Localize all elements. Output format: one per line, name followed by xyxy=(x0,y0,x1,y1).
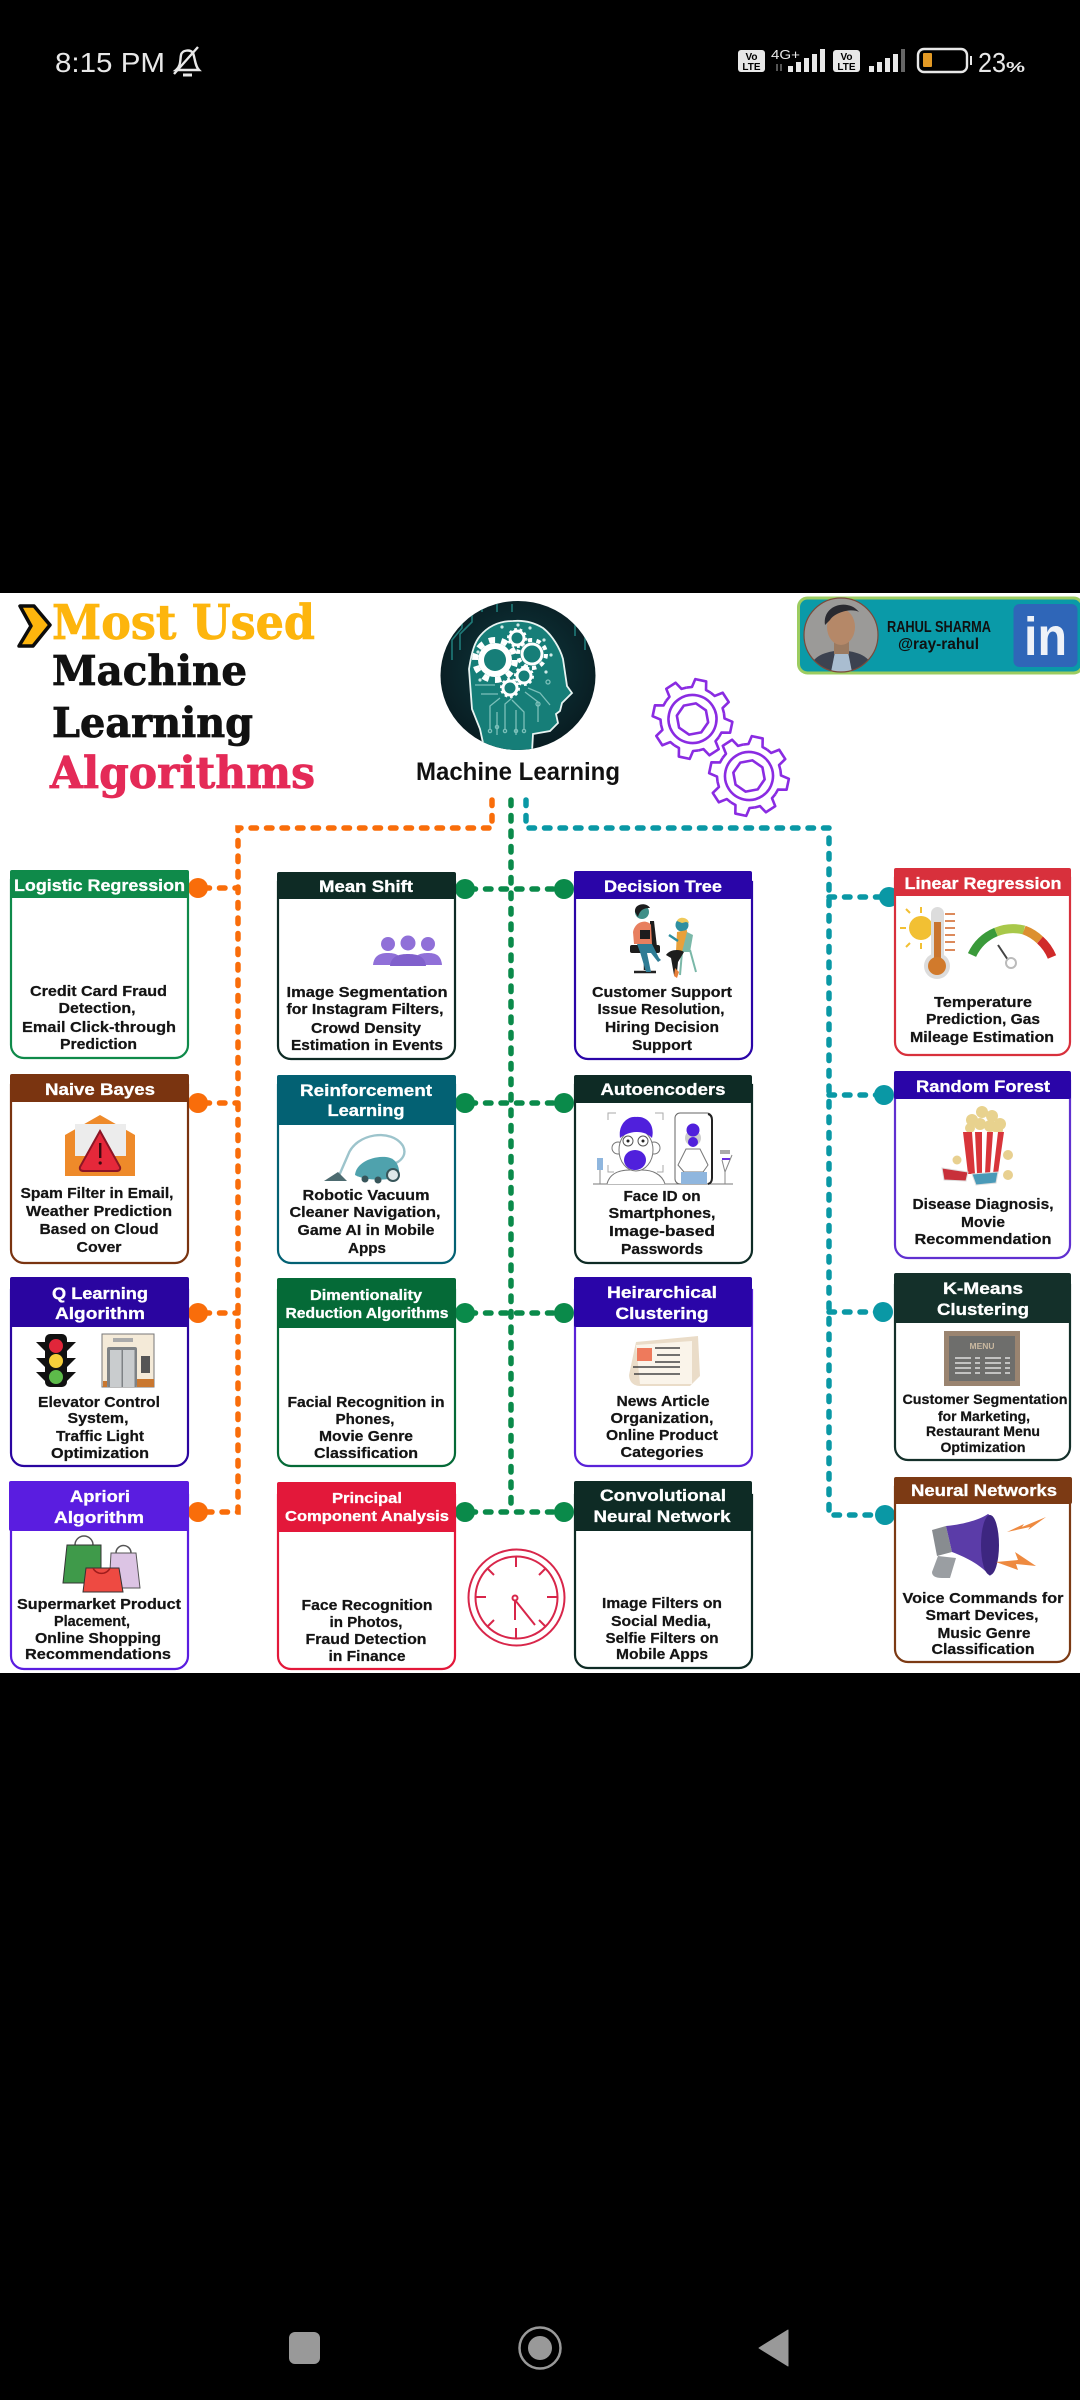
description: Crowd Density xyxy=(311,1020,422,1037)
header xyxy=(10,1074,189,1102)
card: K-Means Clustering xyxy=(894,1273,1071,1460)
description: Organization, xyxy=(610,1410,714,1427)
header: Random Forest xyxy=(916,1078,1051,1096)
description: System, xyxy=(68,1410,128,1427)
icon: purple gears xyxy=(646,672,796,823)
card: Random Forest xyxy=(894,1071,1071,1258)
header xyxy=(574,1075,752,1103)
header: Convolutional xyxy=(600,1487,726,1505)
icon: restaurant menu board: MENU xyxy=(969,1341,995,1351)
icon: VoLTE badge 1: Vo xyxy=(745,52,758,63)
description xyxy=(912,1196,1054,1248)
clock time: 8:15 PM xyxy=(55,47,165,78)
header: Component Analysis xyxy=(285,1508,449,1525)
description: Image Segmentation xyxy=(286,984,448,1001)
description: Prediction xyxy=(60,1036,137,1053)
status bar xyxy=(55,47,1025,78)
description: Customer Support xyxy=(592,984,732,1001)
header xyxy=(277,1482,456,1532)
icon: recents button xyxy=(289,2332,320,2364)
title xyxy=(19,595,315,799)
icon: thermometer and sun xyxy=(900,907,955,979)
description xyxy=(17,1596,181,1663)
connector: green xyxy=(455,800,574,1522)
icon: muted bell xyxy=(174,47,199,75)
header xyxy=(9,1481,189,1531)
icon: VoLTE badge 2: LTE xyxy=(837,62,856,73)
description: Credit Card Fraud xyxy=(30,983,167,1000)
header: Apriori xyxy=(70,1488,130,1506)
name: RAHUL SHARMA xyxy=(887,619,991,636)
icon: back button xyxy=(759,2330,788,2366)
description: Supermarket Product xyxy=(17,1596,181,1613)
description: in Photos, xyxy=(330,1614,402,1631)
description: Recommendation xyxy=(914,1231,1052,1248)
icon: VoLTE badge 1: LTE xyxy=(742,62,761,73)
description xyxy=(902,1391,1068,1455)
header: Reinforcement xyxy=(300,1082,433,1100)
header xyxy=(10,1277,189,1327)
header xyxy=(574,871,752,899)
description xyxy=(288,1394,444,1462)
description: Cleaner Navigation, xyxy=(290,1204,440,1221)
header: Learning xyxy=(328,1102,404,1120)
header: Q Learning xyxy=(52,1285,148,1303)
description: Voice Commands for xyxy=(902,1590,1064,1607)
icon: traffic light xyxy=(36,1334,76,1387)
description: Placement, xyxy=(54,1613,130,1630)
white brain gears xyxy=(475,623,553,697)
signal 2 xyxy=(869,49,905,72)
title line: Machine: Machine xyxy=(52,647,247,695)
description: Online Product xyxy=(606,1427,718,1444)
icon: megaphone xyxy=(932,1514,1046,1578)
icon: machine learning head xyxy=(440,601,596,752)
description: Optimization xyxy=(940,1439,1026,1455)
title line: Most Used: Most Used xyxy=(52,595,315,651)
header: Neural Network xyxy=(594,1508,731,1526)
connector: teal xyxy=(526,800,899,1525)
card: Neural Networks xyxy=(894,1477,1072,1662)
description: Email Click-through xyxy=(22,1019,176,1036)
description: Restaurant Menu xyxy=(926,1423,1040,1439)
description: for Instagram Filters, xyxy=(286,1001,444,1018)
description: Cover xyxy=(76,1239,122,1256)
header xyxy=(277,1278,456,1328)
description: Movie xyxy=(961,1214,1005,1231)
header xyxy=(894,1071,1071,1099)
header: Mean Shift xyxy=(319,878,414,896)
description: Hiring Decision xyxy=(605,1019,719,1036)
navigation bar xyxy=(289,2328,788,2368)
icon: VoLTE badge 2: Vo xyxy=(840,52,853,63)
card: Convolutional Neural Network xyxy=(574,1481,752,1668)
icon: people group xyxy=(373,936,442,966)
icon: two people talking xyxy=(630,904,696,978)
header: K-Means xyxy=(943,1280,1023,1298)
description: Optimization xyxy=(51,1445,149,1462)
description xyxy=(910,994,1054,1046)
header: Clustering xyxy=(937,1301,1029,1319)
header xyxy=(894,1273,1071,1323)
description: Smartphones, xyxy=(608,1205,716,1222)
icon: spam envelope xyxy=(65,1115,135,1176)
description: Fraud Detection xyxy=(306,1631,426,1648)
battery percent xyxy=(978,47,1025,78)
description: Traffic Light xyxy=(56,1428,144,1445)
icon: shopping bags xyxy=(63,1536,140,1592)
card: Naive Bayes xyxy=(10,1074,189,1263)
card: Logistic Regression xyxy=(10,870,189,1058)
description: Elevator Control xyxy=(38,1394,160,1411)
connector: orange xyxy=(188,800,492,1522)
description: Face Recognition xyxy=(302,1597,432,1614)
description: Facial Recognition in xyxy=(288,1394,444,1411)
handle: @ray-rahul xyxy=(898,636,979,653)
header: Linear Regression xyxy=(904,875,1062,893)
description: Detection, xyxy=(58,1000,136,1017)
icon: VoLTE badge 2 xyxy=(833,50,860,73)
card: Q Learning Algorithm xyxy=(10,1277,189,1466)
description xyxy=(22,983,176,1053)
description: Mileage Estimation xyxy=(910,1029,1054,1046)
header xyxy=(10,870,189,898)
description: Issue Resolution, xyxy=(598,1001,724,1018)
description: Phones, xyxy=(336,1411,394,1428)
description: Apps xyxy=(348,1240,386,1257)
description: Image-based xyxy=(609,1223,715,1240)
header xyxy=(894,868,1071,896)
description: Robotic Vacuum xyxy=(302,1187,430,1204)
battery percent: 23 xyxy=(978,47,1006,78)
description: Movie Genre xyxy=(319,1428,413,1445)
signal 1 with 4G+ xyxy=(771,47,825,72)
description: Mobile Apps xyxy=(616,1646,708,1663)
description: Online Shopping xyxy=(35,1630,161,1647)
signal 1 with 4G+: 4G+ xyxy=(771,47,800,62)
icon: elevator xyxy=(102,1334,154,1387)
photo xyxy=(804,598,878,672)
description: Prediction, Gas xyxy=(926,1011,1040,1028)
icon: LinkedIn: in xyxy=(1024,607,1067,667)
description: Recommendations xyxy=(25,1646,171,1663)
description: Music Genre xyxy=(938,1625,1030,1642)
header: Clustering xyxy=(616,1305,708,1323)
description xyxy=(608,1188,716,1258)
description xyxy=(592,984,732,1054)
description: Social Media, xyxy=(611,1613,711,1630)
card: Principal Component Analysis xyxy=(277,1482,456,1669)
description: Classification xyxy=(932,1641,1034,1658)
description: Game AI in Mobile xyxy=(298,1222,434,1239)
title line: Learning: Learning xyxy=(52,699,253,747)
header xyxy=(277,1075,456,1125)
description xyxy=(20,1185,174,1256)
description: News Article xyxy=(616,1393,710,1410)
header: Principal xyxy=(332,1490,402,1507)
description xyxy=(286,984,448,1054)
description xyxy=(602,1595,722,1663)
icon: gauge xyxy=(972,929,1052,968)
description xyxy=(606,1393,718,1461)
icon: newspaper xyxy=(629,1336,700,1386)
description: Weather Prediction xyxy=(26,1203,172,1220)
card: Autoencoders xyxy=(574,1075,752,1263)
description: Image Filters on xyxy=(602,1595,722,1612)
description: Estimation in Events xyxy=(291,1037,443,1054)
card: Decision Tree xyxy=(574,871,752,1059)
header: Naive Bayes xyxy=(45,1081,155,1099)
author badge xyxy=(798,598,1080,673)
header xyxy=(894,1477,1072,1504)
header xyxy=(277,872,456,899)
description: Smart Devices, xyxy=(926,1607,1038,1624)
header: Decision Tree xyxy=(604,878,722,896)
title line: Algorithms: Algorithms xyxy=(49,748,315,799)
icon: popcorn and 3D glasses xyxy=(942,1106,1013,1185)
icon: home button xyxy=(520,2328,560,2368)
description xyxy=(302,1597,432,1665)
label: Machine Learning: Machine Learning xyxy=(416,758,620,786)
description: Spam Filter in Email, xyxy=(20,1185,174,1202)
header xyxy=(574,1277,752,1327)
icon: restaurant menu board xyxy=(944,1331,1020,1386)
description: Selfie Filters on xyxy=(606,1630,718,1647)
icon: VoLTE badge 1 xyxy=(738,50,765,73)
header: Logistic Regression xyxy=(14,877,185,895)
header: Algorithm xyxy=(55,1305,145,1323)
card: Heirarchical Clustering xyxy=(574,1277,752,1466)
description: for Marketing, xyxy=(938,1408,1030,1424)
icon: face ID xyxy=(593,1113,733,1184)
header: Algorithm xyxy=(54,1509,144,1527)
description xyxy=(902,1590,1064,1658)
header xyxy=(574,1481,752,1531)
description: Support xyxy=(632,1037,692,1054)
description: Passwords xyxy=(621,1241,703,1258)
card: Dimentionality Reduction Algorithms xyxy=(277,1278,456,1466)
icon: vacuum cleaner xyxy=(324,1135,404,1184)
description: Customer Segmentation xyxy=(902,1391,1068,1407)
header: Reduction Algorithms xyxy=(286,1306,448,1322)
description: Classification xyxy=(314,1445,418,1462)
card: Reinforcement Learning xyxy=(277,1075,456,1263)
description: Temperature xyxy=(934,994,1032,1011)
description: Disease Diagnosis, xyxy=(912,1196,1054,1213)
description: in Finance xyxy=(328,1648,406,1665)
card: Apriori Algorithm xyxy=(9,1481,189,1669)
icon: clock xyxy=(468,1550,564,1646)
circuit traces outside head xyxy=(452,604,585,660)
header: Heirarchical xyxy=(607,1284,717,1302)
infographic white panel xyxy=(0,593,1080,1673)
header: Neural Networks xyxy=(911,1482,1057,1500)
icon: battery xyxy=(918,49,972,72)
header: Autoencoders xyxy=(600,1081,726,1099)
icon: chevron xyxy=(19,606,50,646)
description: Based on Cloud xyxy=(40,1221,158,1238)
description xyxy=(38,1394,160,1462)
card: Mean Shift xyxy=(277,872,456,1059)
header: Dimentionality xyxy=(310,1288,422,1304)
battery percent: % xyxy=(1006,59,1025,76)
card: Linear Regression xyxy=(894,868,1071,1055)
description: Categories xyxy=(620,1444,704,1461)
description xyxy=(290,1187,440,1257)
description: Face ID on xyxy=(624,1188,700,1205)
